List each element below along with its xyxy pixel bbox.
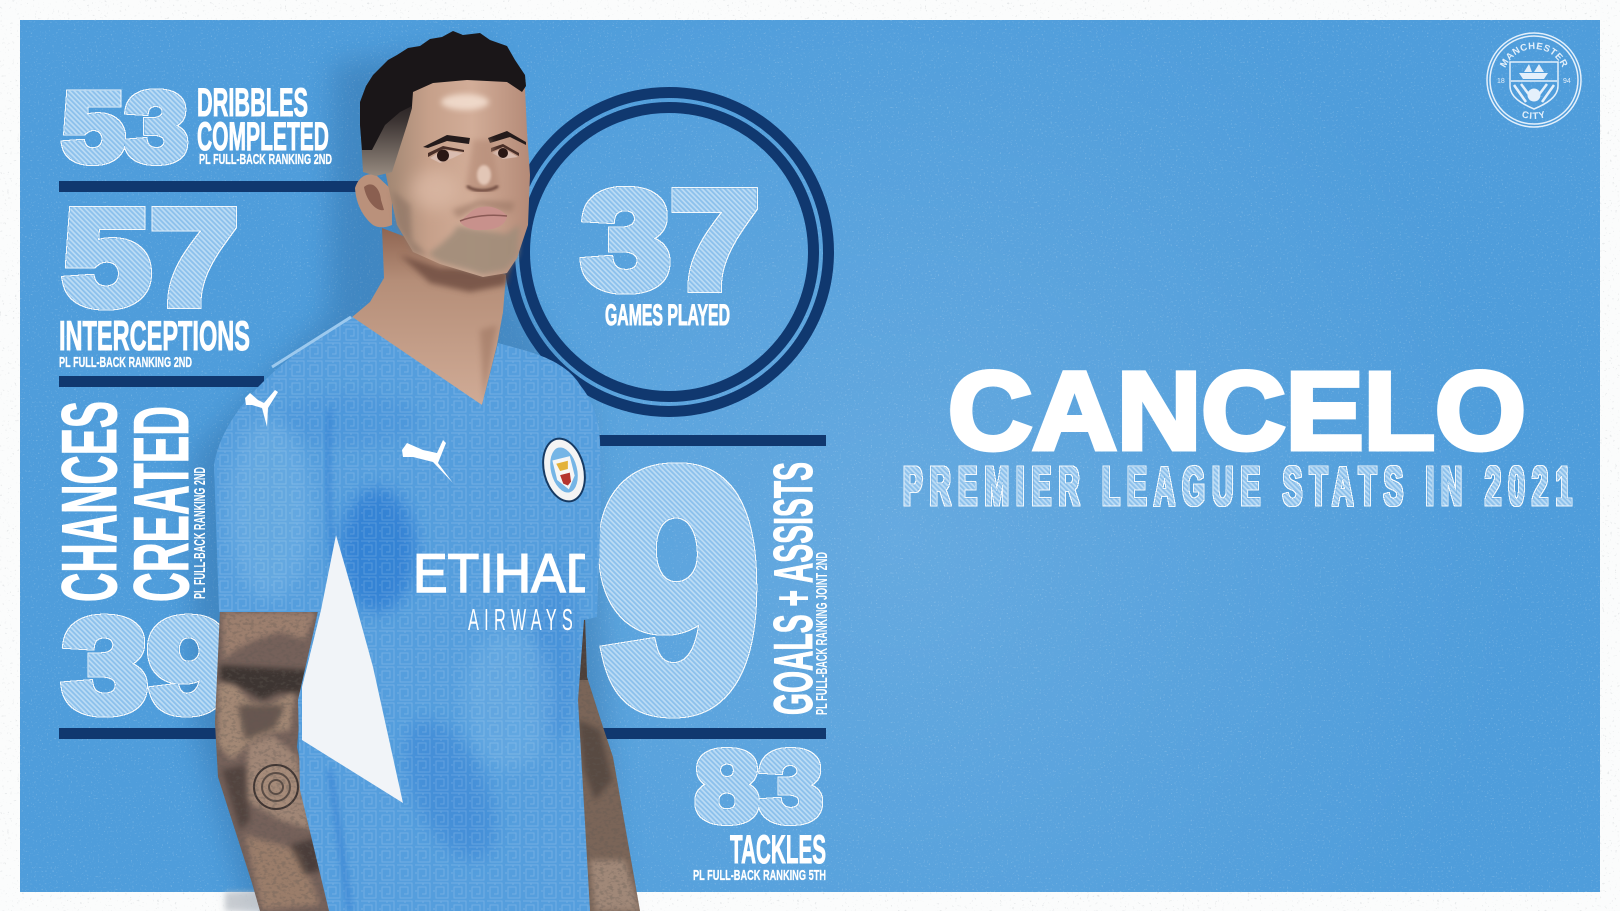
crest text bottom: CITY xyxy=(1522,111,1544,119)
stat circle: 37 games played xyxy=(510,92,828,412)
number: 53: 53 xyxy=(62,72,188,182)
moustache shadow xyxy=(452,200,515,218)
hair xyxy=(360,31,526,150)
stat: 53 dribbles completed xyxy=(62,72,332,182)
lip line xyxy=(460,215,507,221)
crest outer rings xyxy=(1487,33,1581,127)
face xyxy=(385,72,530,277)
sponsor word: airways: AIRWAYS xyxy=(468,602,578,637)
floor shadow on white strip xyxy=(225,892,265,911)
label: tackles: TACKLES xyxy=(730,828,826,872)
player drop shadow xyxy=(193,44,618,911)
ranking text: PL FULL-BACK RANKING 2ND xyxy=(192,467,209,599)
label: chances: CHANCES xyxy=(45,401,133,602)
nose highlight xyxy=(477,165,491,185)
crest stripes xyxy=(1514,84,1554,102)
left eye shadow xyxy=(428,146,464,157)
under chin shadow xyxy=(400,255,510,292)
right arm with tattoos xyxy=(578,620,640,911)
forehead highlight xyxy=(441,94,489,110)
title block xyxy=(903,350,1579,517)
player photo illustration xyxy=(210,31,645,911)
label: goals + assists: GOALS + ASSISTS xyxy=(762,462,824,715)
number: 37: 37 xyxy=(582,163,759,318)
number: 9: 9 xyxy=(597,404,759,776)
ranking text: PL FULL-BACK RANKING 5TH xyxy=(693,867,826,884)
icon: puma logo on sleeve xyxy=(245,390,278,427)
stat: 39 chances created xyxy=(45,401,232,739)
icon: club badge on shirt xyxy=(536,433,592,507)
hair fade xyxy=(360,90,412,176)
crest rose xyxy=(1528,88,1540,102)
crest year right: 94 xyxy=(1563,78,1571,85)
divider bar 2 xyxy=(59,376,264,387)
lips xyxy=(460,206,507,230)
nostril line xyxy=(467,186,498,190)
head xyxy=(355,31,530,277)
crest shield xyxy=(1510,62,1558,109)
number: 57: 57 xyxy=(63,182,238,333)
label: created: CREATED xyxy=(117,406,205,602)
right eye shadow xyxy=(491,144,519,156)
label: interceptions: INTERCEPTIONS xyxy=(59,312,250,359)
label: completed: COMPLETED xyxy=(197,115,329,159)
right eye xyxy=(492,148,518,159)
number: 83: 83 xyxy=(695,731,823,843)
sponsor word: etihad: ETIHAD xyxy=(413,542,603,604)
collar trim xyxy=(272,317,351,367)
shirt xyxy=(210,310,610,911)
inner ear xyxy=(364,184,384,210)
sponsor: etihad airways xyxy=(416,554,585,630)
ranking text: PL FULL-BACK RANKING 2ND xyxy=(199,151,332,168)
stat: 83 tackles xyxy=(693,731,826,884)
icon: manchester city crest xyxy=(1486,32,1582,128)
stat: 9 goals + assists xyxy=(597,404,831,776)
crest text top: MANCHESTER xyxy=(1500,42,1568,68)
divider bar 4 xyxy=(590,435,826,446)
nose shading xyxy=(466,140,499,193)
left eye xyxy=(430,150,463,163)
inner ring xyxy=(524,108,814,396)
jaw stubble xyxy=(392,190,428,256)
crest ship xyxy=(1519,64,1548,79)
outer ring xyxy=(510,92,828,412)
ear xyxy=(355,174,392,227)
number: 39: 39 xyxy=(63,592,232,739)
icon: puma logo on chest xyxy=(402,440,453,483)
crest divider xyxy=(1511,80,1557,82)
ranking text: PL FULL-BACK RANKING 2ND xyxy=(59,354,192,371)
crest year left: 18 xyxy=(1497,78,1505,85)
cheek highlight xyxy=(411,170,459,210)
neck xyxy=(351,228,506,405)
neck shading xyxy=(480,325,497,402)
white side panel xyxy=(302,535,403,803)
divider bar 1 xyxy=(59,181,359,192)
stat: 57 interceptions xyxy=(59,182,250,371)
beard stubble xyxy=(428,224,520,275)
left arm with tattoos xyxy=(215,612,329,911)
divider bar 5 xyxy=(596,728,826,739)
eyebrows xyxy=(423,131,526,148)
label: games played: GAMES PLAYED xyxy=(605,299,730,332)
ranking text: PL FULL-BACK RANKING JOINT 2ND xyxy=(814,552,831,715)
label: dribbles: DRIBBLES xyxy=(197,81,308,125)
title: cancelo: CANCELO xyxy=(948,350,1526,473)
divider bar 3 xyxy=(59,728,224,739)
